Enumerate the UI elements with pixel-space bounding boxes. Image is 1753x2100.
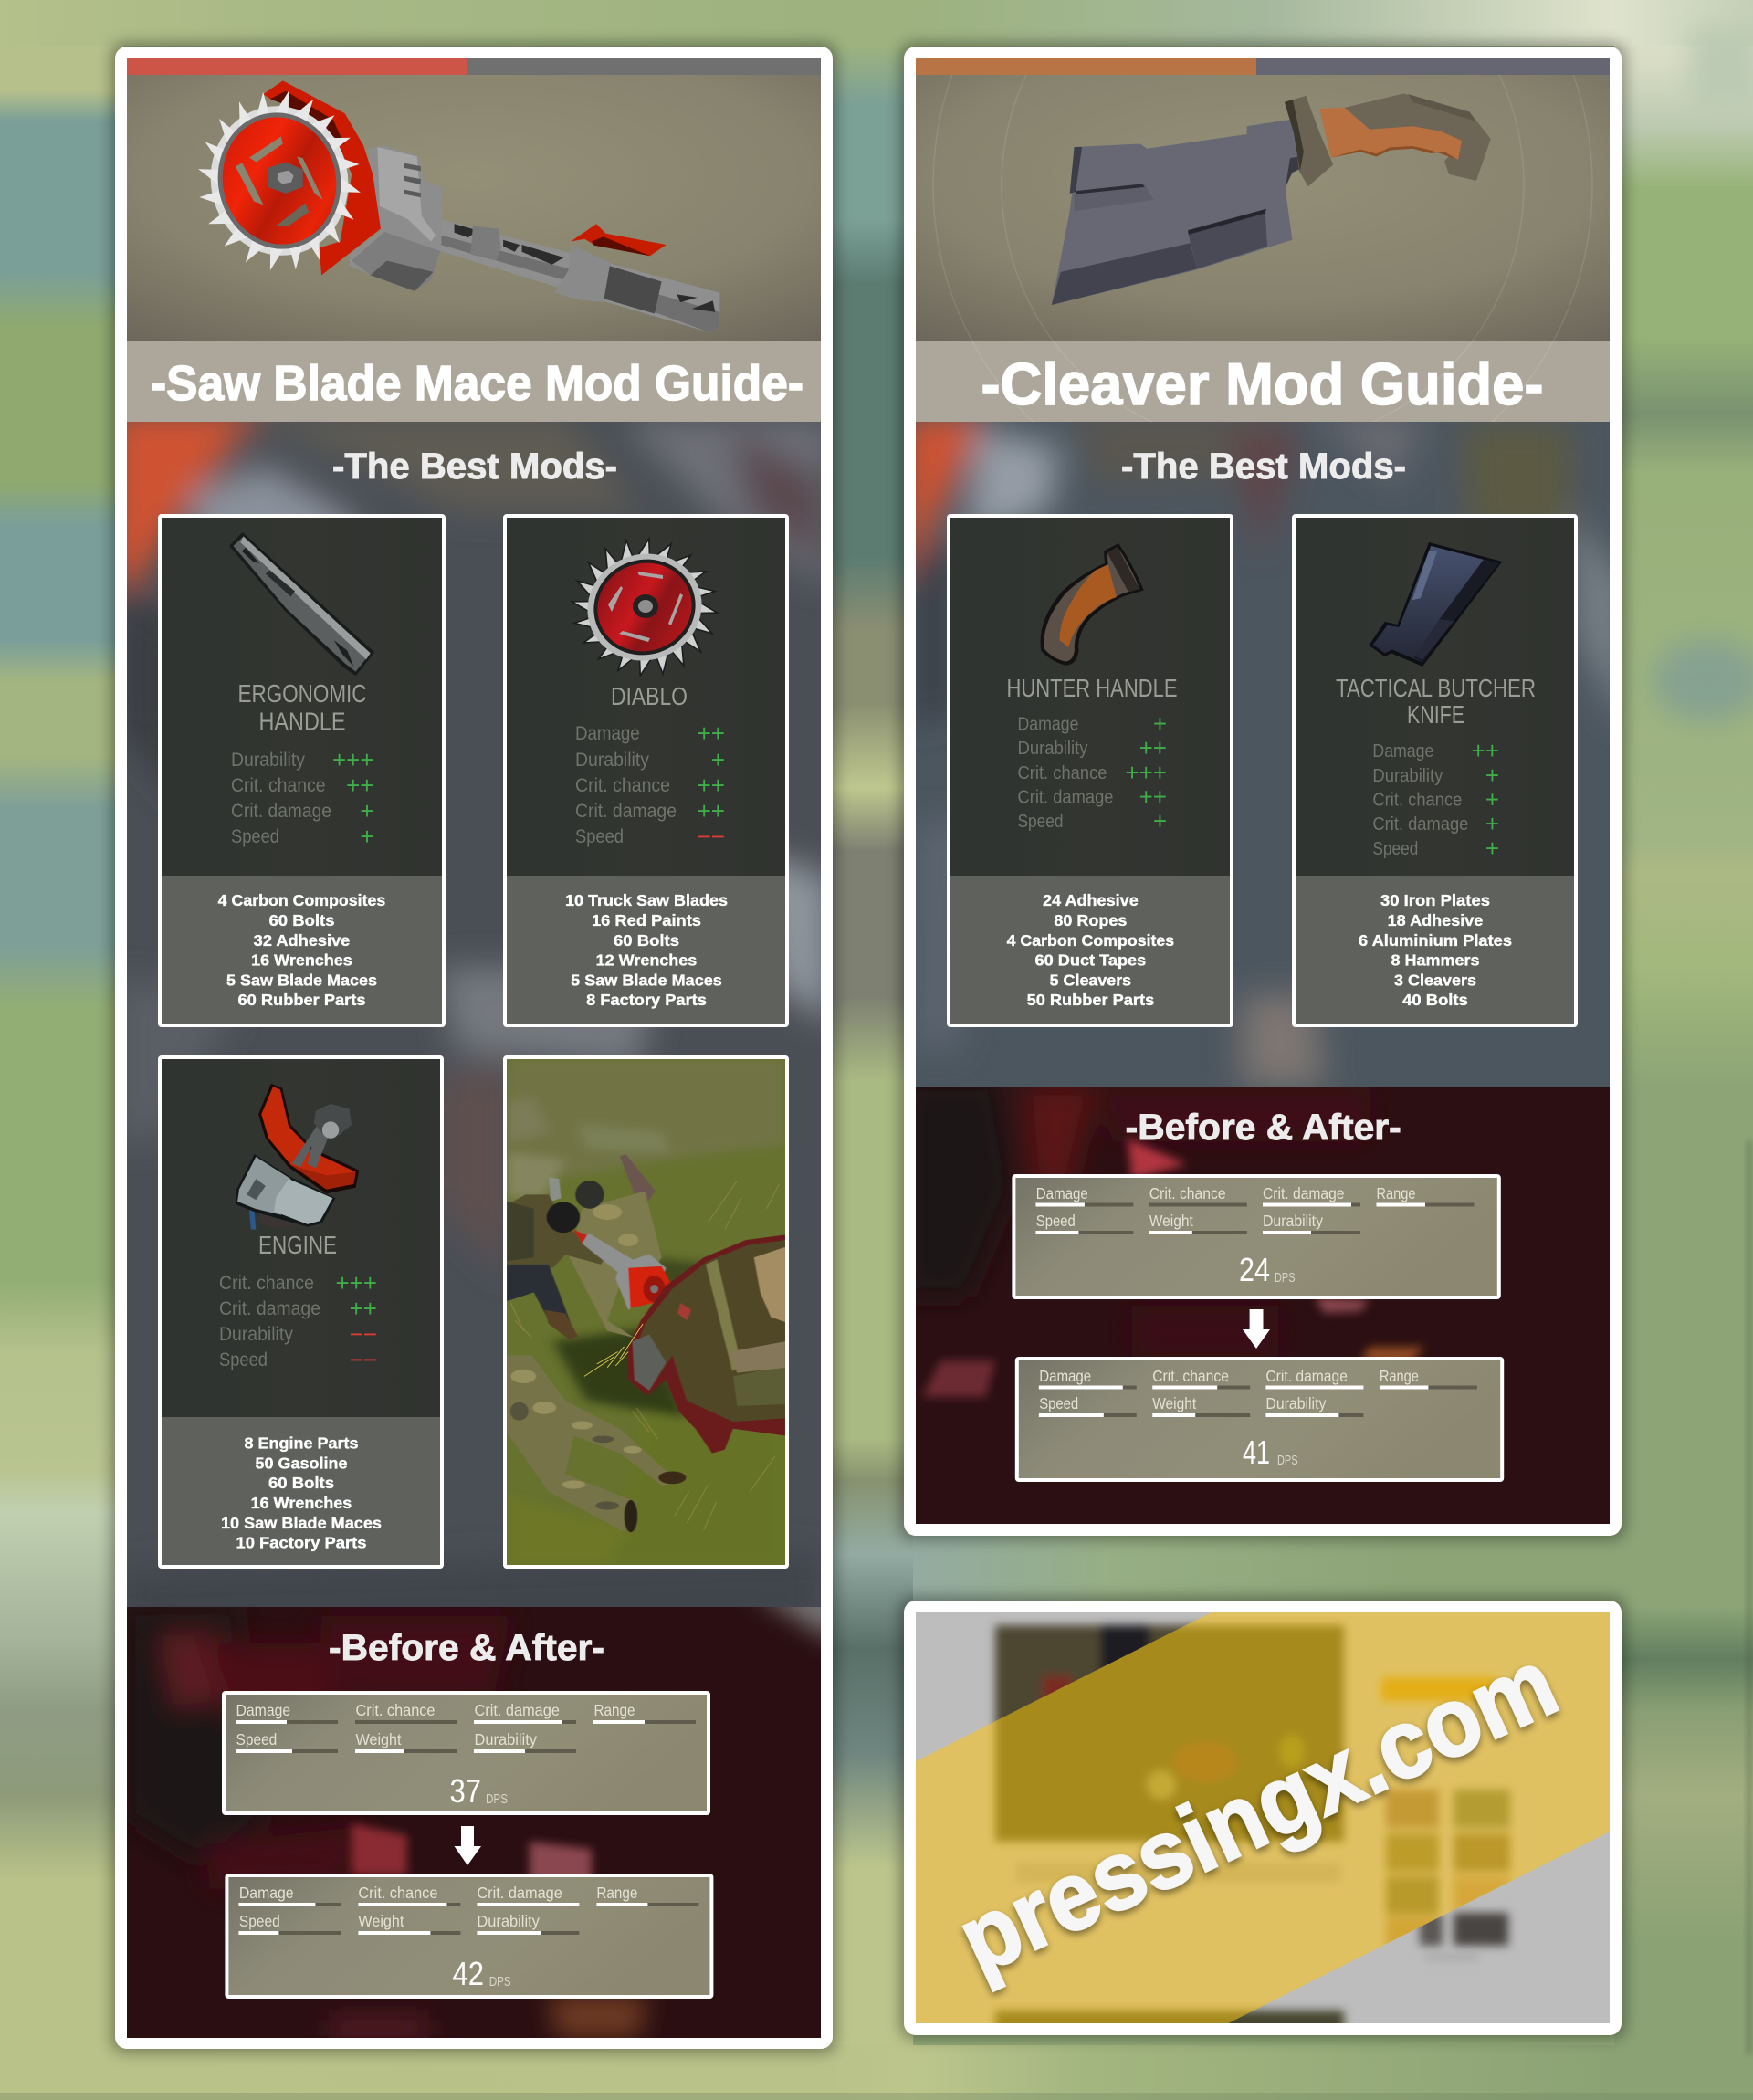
mod card: engine — [160, 1057, 442, 1567]
stat bars: Durability — [1265, 1394, 1327, 1412]
materials: 80 Ropes — [1054, 911, 1128, 929]
stat bars: Weight — [1149, 1212, 1193, 1230]
stat list: Crit. damage — [1372, 814, 1468, 835]
materials: 50 Gasoline — [256, 1454, 348, 1472]
title: -Cleaver Mod Guide- — [981, 351, 1543, 417]
title band — [127, 341, 821, 423]
heading: the best mods: -The Best Mods- — [332, 446, 617, 487]
materials: 10 Truck Saw Blades — [565, 891, 728, 909]
name: DIABLO — [611, 682, 688, 710]
stat bars — [1039, 1367, 1477, 1417]
survivor with weapon — [507, 1194, 670, 1339]
materials: 8 Engine Parts — [245, 1433, 359, 1452]
materials: 5 Cleavers — [1050, 971, 1131, 990]
upper corpse — [549, 1154, 662, 1338]
title band — [916, 341, 1610, 423]
stat bars: Range — [1380, 1367, 1419, 1385]
stat list — [575, 719, 725, 850]
name — [237, 679, 367, 736]
dps value — [453, 1955, 511, 1992]
stat bars — [236, 1701, 696, 1753]
name: HUNTER HANDLE — [1006, 674, 1178, 702]
materials: 30 Iron Plates — [1380, 891, 1490, 909]
stat bars: Crit. damage — [1263, 1184, 1344, 1202]
header colour bar — [127, 58, 821, 75]
dps value: 41 — [1243, 1433, 1270, 1471]
stat bars — [238, 1884, 698, 1935]
stat list: +++ — [332, 746, 374, 773]
stat bars: Damage — [1039, 1367, 1091, 1385]
materials: 6 Aluminium Plates — [1359, 931, 1512, 950]
stat list: + — [1485, 810, 1499, 837]
stat bars: Weight — [356, 1730, 402, 1748]
heading: before and after: -Before & After- — [1126, 1108, 1401, 1148]
stat list: Durability — [1372, 765, 1443, 786]
stat list: Crit. damage — [575, 800, 677, 822]
stat list: Crit. damage — [219, 1297, 320, 1319]
mod card: tactical butcher knife — [1294, 516, 1576, 1025]
arrow: before to after — [455, 1826, 481, 1865]
materials: 16 Wrenches — [251, 1494, 352, 1512]
materials: 60 Rubber Parts — [237, 991, 366, 1009]
heading: the best mods: -The Best Mods- — [1121, 446, 1406, 487]
stat bars: Range — [596, 1884, 637, 1902]
materials: 4 Carbon Composites — [1007, 931, 1174, 950]
stat list: ++ — [1139, 783, 1167, 811]
stat bars — [1035, 1184, 1474, 1234]
stat list: Crit. chance — [575, 774, 670, 796]
materials: 32 Adhesive — [254, 931, 351, 950]
stat bars: Durability — [477, 1912, 540, 1930]
stat list: ++ — [698, 797, 725, 824]
stat list — [1017, 710, 1167, 835]
stat list: + — [360, 797, 374, 824]
stat list: −− — [350, 1320, 377, 1348]
stat bars: Crit. chance — [356, 1701, 435, 1719]
materials: 10 Factory Parts — [236, 1534, 367, 1552]
stat list: Durability — [575, 749, 649, 771]
stat list: Crit. damage — [1017, 787, 1114, 807]
materials: 5 Saw Blade Maces — [571, 971, 722, 990]
stat list: Speed — [1017, 811, 1063, 832]
materials: 12 Wrenches — [596, 951, 698, 970]
stat list: ++ — [350, 1295, 377, 1322]
stat bars: Weight — [1152, 1394, 1196, 1412]
stat list: ++ — [346, 772, 374, 799]
section background: the best mods — [110, 411, 831, 1634]
blurred preview through band — [995, 1625, 1510, 2038]
dps value: DPS — [489, 1975, 511, 1990]
dps value: 24 — [1239, 1251, 1270, 1288]
stat bars: Weight — [358, 1912, 404, 1930]
illustration: cleaver — [1052, 93, 1491, 305]
stat list: ++ — [1472, 737, 1499, 764]
stat list: −− — [698, 823, 725, 850]
materials: 24 Adhesive — [1043, 891, 1139, 909]
stat list: + — [1485, 786, 1499, 814]
stat bars: Durability — [1263, 1212, 1323, 1230]
name — [1336, 674, 1536, 729]
stat bars: Range — [1377, 1184, 1415, 1202]
materials: 8 Factory Parts — [586, 991, 707, 1009]
stat list: ++ — [1139, 734, 1167, 761]
gameplay screenshot — [505, 1057, 787, 1567]
stat bars: Speed — [239, 1912, 280, 1930]
dps value — [1243, 1433, 1298, 1471]
materials: 8 Hammers — [1391, 951, 1480, 970]
stat bars: Damage — [1036, 1184, 1088, 1202]
mutant zombie — [627, 1234, 785, 1454]
yellow diagonal band — [916, 1612, 1610, 2023]
materials — [565, 891, 728, 1009]
materials: 50 Rubber Parts — [1027, 991, 1154, 1009]
stat bars: Crit. damage — [1265, 1367, 1348, 1385]
materials — [218, 891, 386, 1009]
stat list: Crit. damage — [231, 800, 331, 822]
blurred website preview — [916, 1612, 1610, 2038]
stat list: +++ — [335, 1269, 377, 1297]
dps value: DPS — [486, 1792, 508, 1807]
materials: 60 Bolts — [268, 1474, 334, 1492]
stat bars: Range — [593, 1701, 635, 1719]
dps value — [1239, 1251, 1295, 1288]
stat list: Speed — [219, 1349, 268, 1370]
stat list: Crit. chance — [219, 1272, 314, 1294]
stat list: Speed — [231, 825, 279, 847]
section background: the best mods — [904, 415, 1625, 1087]
stat list: + — [711, 746, 725, 773]
name: KNIFE — [1407, 700, 1464, 729]
illustration: saw blade mace — [191, 80, 719, 332]
materials — [221, 1433, 382, 1552]
dps value: 42 — [453, 1955, 484, 1992]
stat list — [1372, 737, 1499, 862]
materials: 16 Red Paints — [592, 911, 701, 929]
mod card: diablo — [505, 516, 787, 1025]
stat list: Crit. chance — [231, 774, 325, 796]
materials — [1359, 891, 1512, 1009]
materials: 40 Bolts — [1402, 991, 1468, 1009]
stat list: Crit. chance — [1017, 762, 1107, 783]
materials: 10 Saw Blade Maces — [221, 1514, 382, 1532]
stat list: ++ — [698, 772, 725, 799]
stat list: + — [1485, 761, 1499, 789]
materials: 60 Bolts — [268, 911, 335, 929]
title: -Saw Blade Mace Mod Guide- — [151, 356, 803, 411]
stat list: Durability — [1017, 738, 1088, 759]
icon: engine — [236, 1084, 359, 1230]
stat list: Damage — [1017, 714, 1079, 734]
stat bars: Damage — [239, 1884, 294, 1902]
mod card: hunter handle — [949, 516, 1232, 1025]
materials: 5 Saw Blade Maces — [226, 971, 377, 990]
arrow: before to after — [1243, 1309, 1270, 1349]
dps value: DPS — [1277, 1454, 1298, 1468]
stat bars: Durability — [475, 1730, 537, 1748]
stat list: + — [1485, 835, 1499, 862]
name: TACTICAL BUTCHER — [1336, 674, 1536, 702]
url text: pressingx.com — [943, 1629, 1572, 1994]
materials: 16 Wrenches — [251, 951, 352, 970]
stat bars: Damage — [236, 1701, 290, 1719]
stat list: Durability — [231, 749, 305, 771]
stat list: Crit. chance — [1372, 790, 1462, 811]
panel: cleaver guide — [904, 0, 1625, 1536]
panel: saw blade mace guide — [110, 47, 840, 2049]
stat list — [231, 746, 374, 850]
materials — [1007, 891, 1174, 1009]
dps value — [449, 1772, 508, 1810]
stats panel: before 37 dps — [224, 1693, 709, 1813]
section background: before and after — [904, 1082, 1610, 1524]
stat bars: Speed — [236, 1730, 277, 1748]
stat list: Damage — [1372, 740, 1433, 761]
stat list: Durability — [219, 1323, 293, 1345]
dps value: DPS — [1275, 1271, 1295, 1286]
hero backdrop — [127, 75, 821, 341]
panel: pressingx promo — [904, 1601, 1622, 2038]
name: ENGINE — [258, 1231, 337, 1259]
hero backdrop — [916, 75, 1610, 341]
lower corpse — [507, 1355, 686, 1532]
stat list: Damage — [575, 722, 640, 744]
stats panel: after 41 dps — [1017, 1359, 1502, 1480]
stat bars: Crit. damage — [475, 1701, 560, 1719]
mod card: ergonomic handle — [160, 516, 444, 1025]
materials: 4 Carbon Composites — [218, 891, 386, 909]
header colour bar — [916, 58, 1610, 75]
stat list: + — [1153, 807, 1167, 835]
icon: tactical butcher knife — [1369, 542, 1502, 667]
stat bars: Crit. chance — [1152, 1367, 1229, 1385]
stat bars: Speed — [1036, 1212, 1076, 1230]
stat list: −− — [350, 1346, 377, 1373]
materials: 60 Bolts — [614, 931, 679, 950]
stat list: + — [360, 823, 374, 850]
icon: hunter handle — [1041, 543, 1144, 666]
stat bars: Speed — [1039, 1394, 1078, 1412]
dps value: 37 — [449, 1772, 481, 1810]
stat bars: Crit. chance — [358, 1884, 437, 1902]
materials: 3 Cleavers — [1394, 971, 1476, 990]
icon: diablo saw blade — [562, 528, 728, 687]
stat list: Speed — [1372, 838, 1418, 859]
stat list: Speed — [575, 825, 624, 847]
stats panel: before 24 dps — [1013, 1176, 1499, 1297]
decorative hero rings — [933, 75, 1592, 422]
name: HANDLE — [259, 707, 345, 736]
stat list: + — [1153, 710, 1167, 738]
stat bars: Crit. damage — [477, 1884, 562, 1902]
stats panel: after 42 dps — [226, 1875, 711, 1997]
section background: before and after — [127, 1589, 840, 2038]
name: ERGONOMIC — [237, 679, 367, 708]
stat list: ++ — [698, 719, 725, 747]
materials: 60 Duct Tapes — [1035, 951, 1147, 970]
stat list: +++ — [1125, 759, 1167, 786]
stat bars: Crit. chance — [1149, 1184, 1226, 1202]
icon: ergonomic handle — [229, 532, 374, 676]
stat list — [219, 1269, 377, 1373]
materials: 18 Adhesive — [1388, 911, 1484, 929]
heading: before and after: -Before & After- — [329, 1628, 604, 1668]
